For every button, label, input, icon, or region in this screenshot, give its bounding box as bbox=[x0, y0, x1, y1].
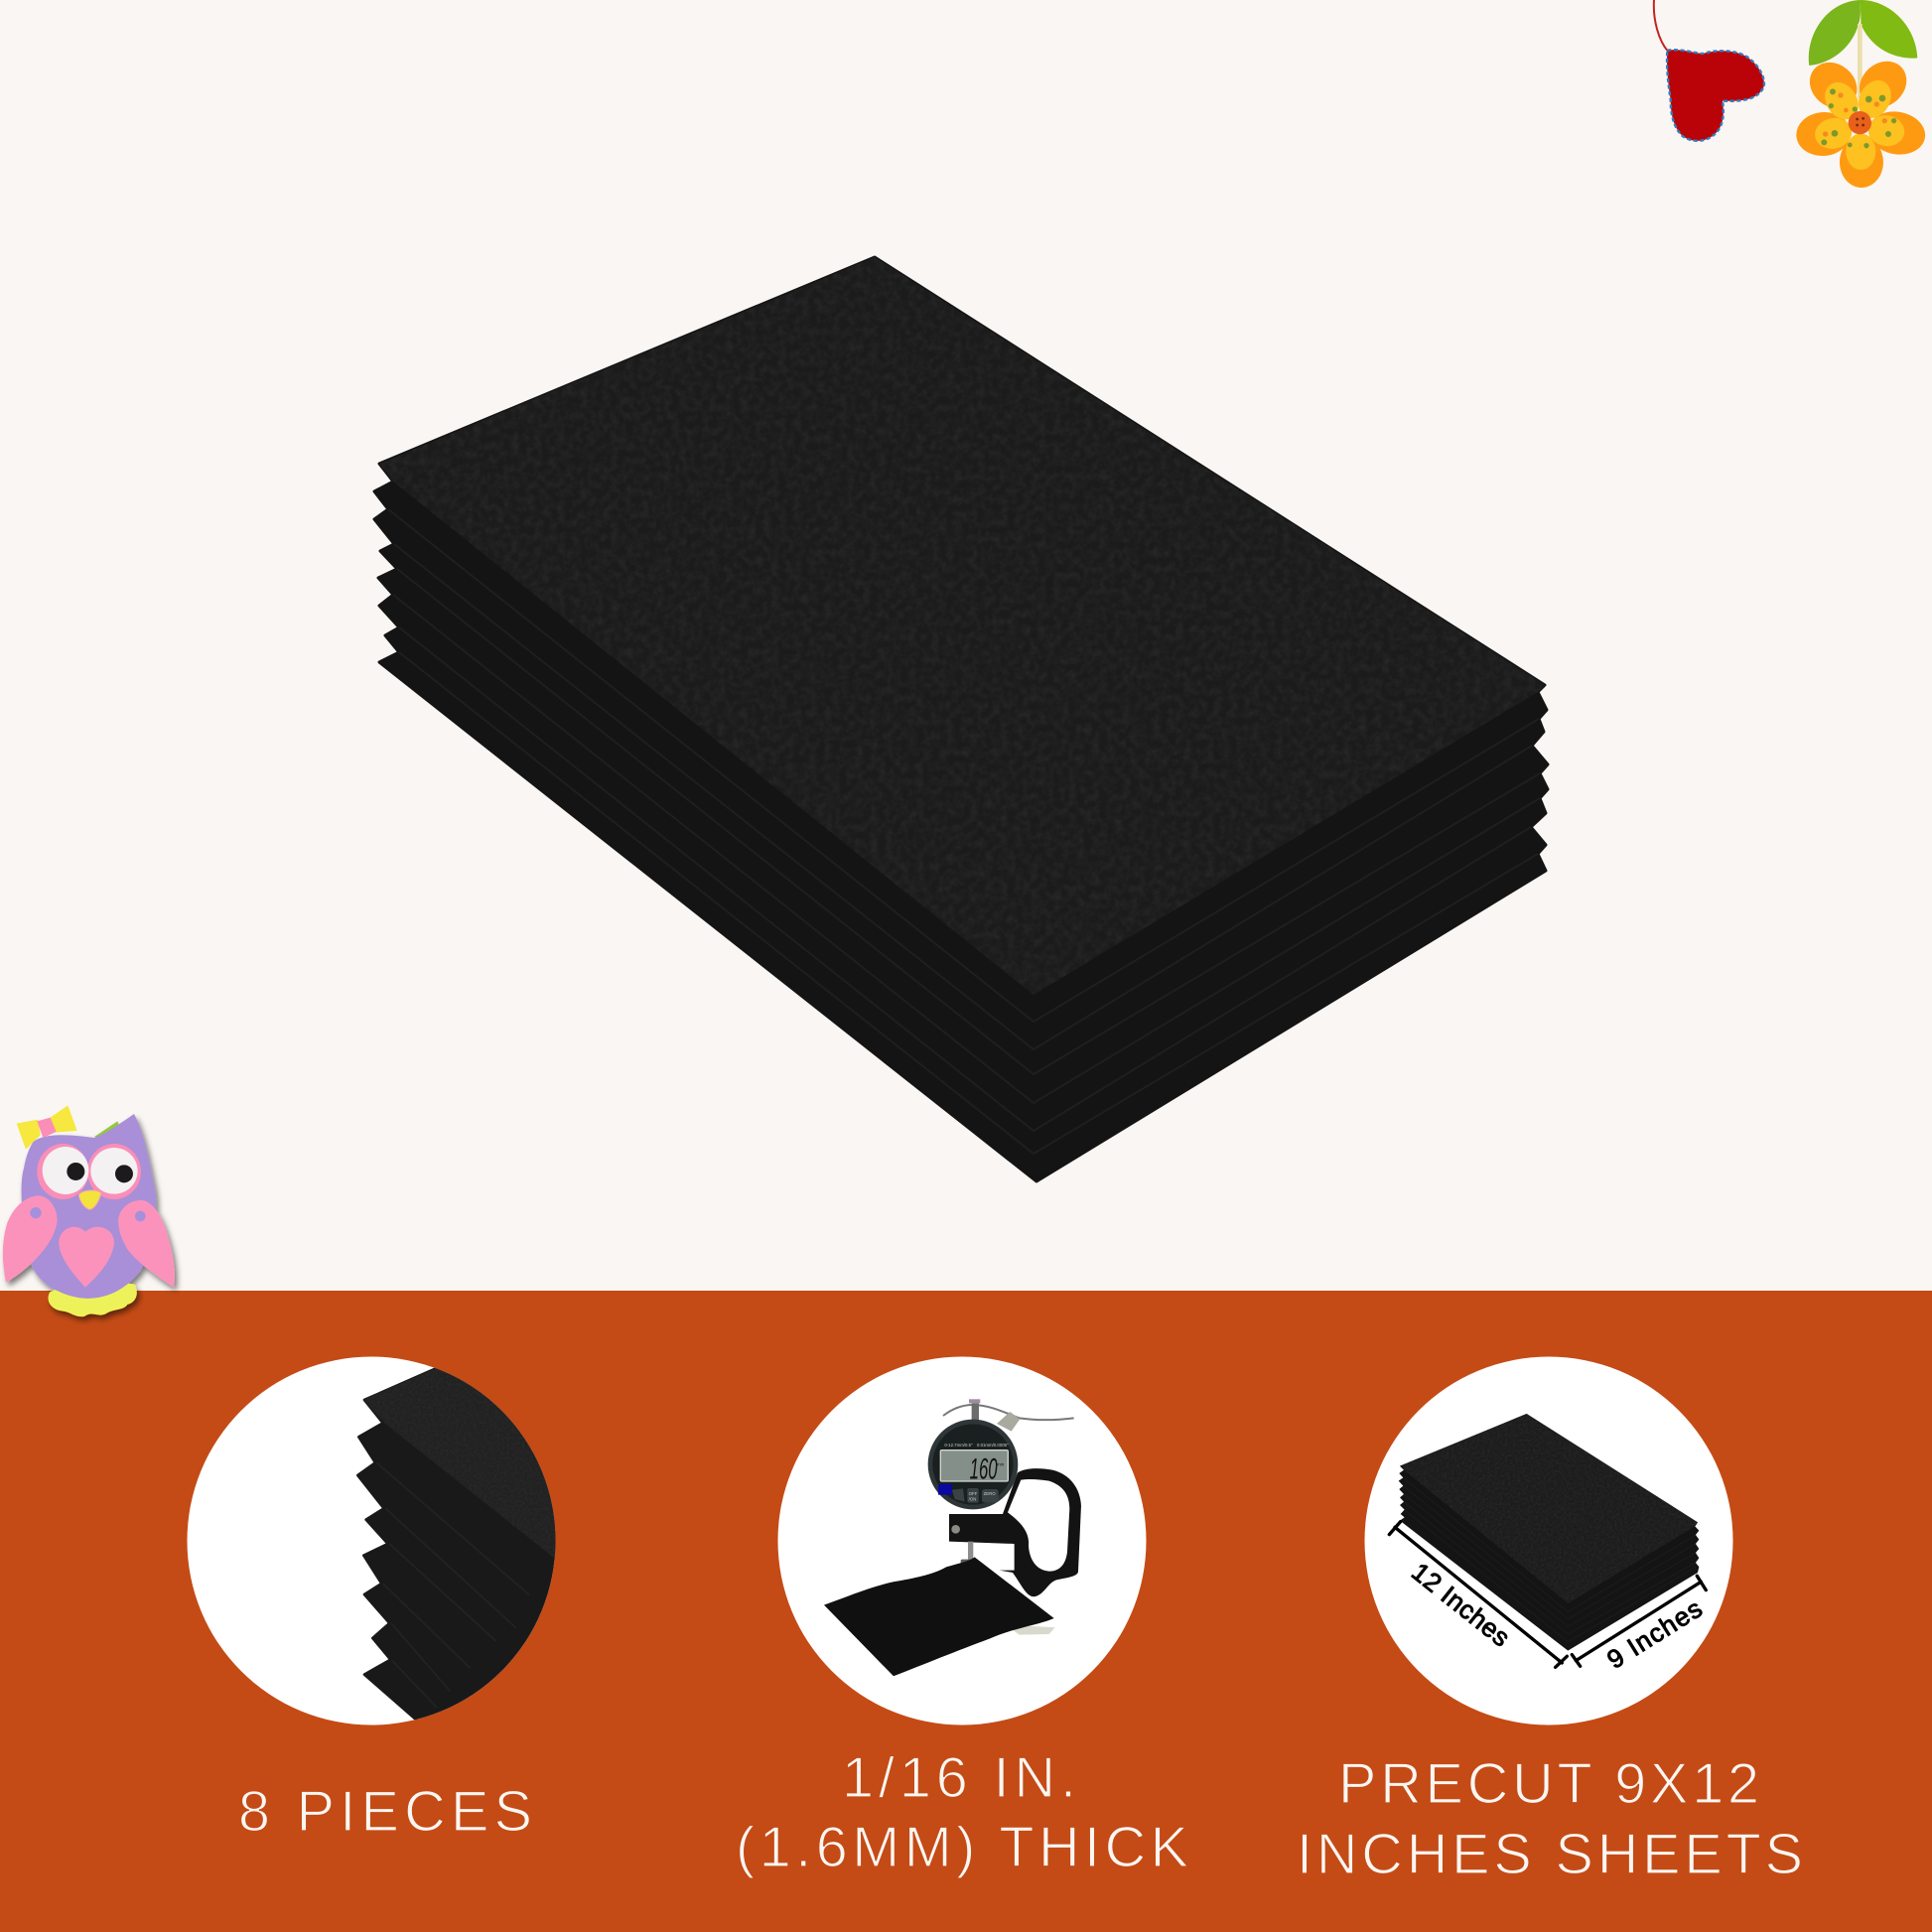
circle: white background bbox=[1364, 1356, 1733, 1725]
decoration: red felt heart bbox=[1654, 0, 1764, 141]
feature band bbox=[0, 1291, 1932, 1932]
decoration: felt owl bbox=[3, 1105, 175, 1316]
icon: digital thickness gauge on felt: 0.01mm/0.0005" bbox=[977, 1443, 1009, 1448]
icon: digital thickness gauge on felt bbox=[824, 1399, 1081, 1676]
circle: white background bbox=[187, 1356, 556, 1725]
icon: digital thickness gauge on felt: 160 bbox=[970, 1452, 998, 1485]
icon: digital thickness gauge on felt: mm bbox=[997, 1462, 1005, 1467]
icon: digital thickness gauge on felt: ZERO bbox=[984, 1491, 996, 1496]
decoration: felt flower with green leaves bbox=[1795, 0, 1929, 188]
icon: digital thickness gauge on felt: /ON bbox=[969, 1497, 976, 1502]
circle: white background bbox=[778, 1356, 1146, 1725]
stacked sheet edge close-up bbox=[355, 1368, 556, 1720]
caption: thickness bbox=[736, 1746, 1188, 1879]
icon: digital thickness gauge on felt: OFF bbox=[969, 1491, 978, 1496]
caption line 2: (1.6MM) THICK bbox=[736, 1816, 1188, 1879]
caption line 2: INCHES SHEETS bbox=[1297, 1823, 1803, 1886]
icon: sheet stack with dimensions: 12 Inches bbox=[1406, 1557, 1516, 1652]
panel: 8 pieces bbox=[187, 1356, 556, 1725]
icon: sheet stack with dimensions: 9 Inches bbox=[1601, 1593, 1708, 1675]
icon: sheet stack with dimensions bbox=[1389, 1414, 1708, 1675]
caption: sheet size bbox=[1297, 1752, 1803, 1886]
icon: digital thickness gauge on felt: 0-12.7mm/0.5" bbox=[944, 1443, 973, 1448]
caption: 8 pieces: 8 PIECES bbox=[238, 1780, 532, 1844]
caption line 1: 1/16 IN. bbox=[842, 1746, 1076, 1810]
main product: stack of black felt sheets bbox=[374, 257, 1548, 1181]
panel: thickness gauge bbox=[778, 1356, 1146, 1725]
caption line 1: PRECUT 9X12 bbox=[1338, 1752, 1759, 1816]
panel: precut size bbox=[1364, 1356, 1733, 1725]
